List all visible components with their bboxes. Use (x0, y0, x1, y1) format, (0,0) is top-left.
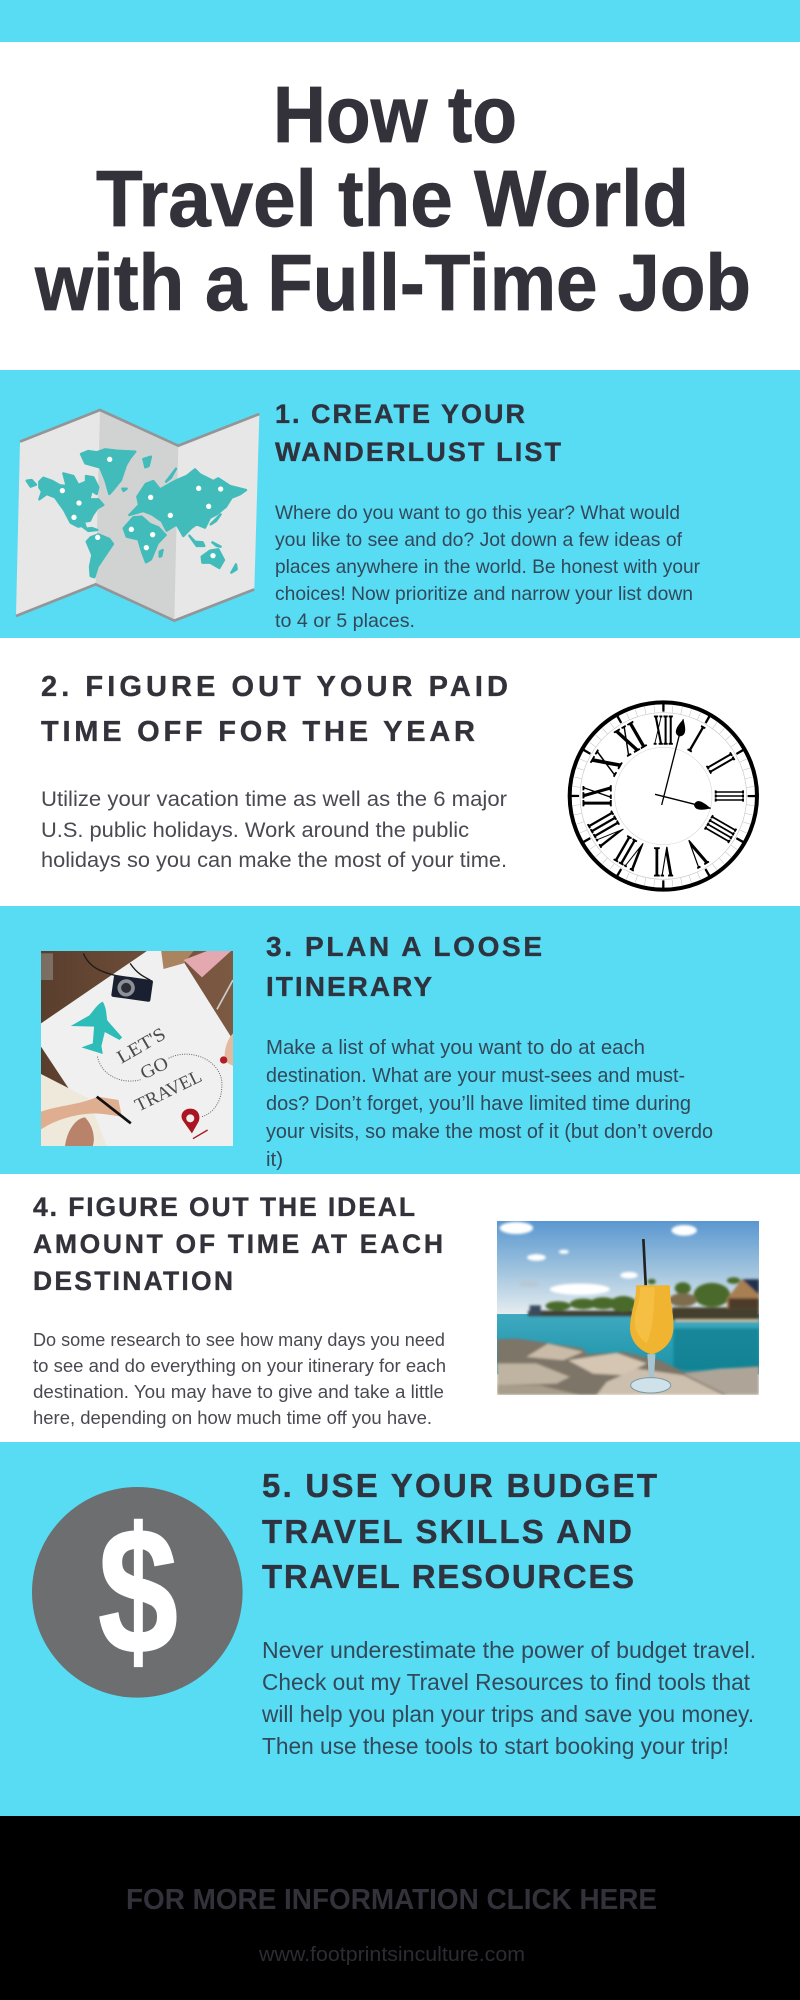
text: step 2 body: Utilize your vacation time as well as the 6 major (41, 787, 507, 811)
website url: www.footprintsinculture.com (258, 1944, 525, 1966)
text: step 2 body: U.S. public holidays. Work around the public (41, 818, 469, 842)
text: step 3 body: Make a list of what you want to do at each (266, 1037, 645, 1059)
text: step 5 body: Never underestimate the power of budget travel. (262, 1637, 756, 1663)
heading: step 5: TRAVEL RESOURCES (262, 1558, 634, 1595)
icon: dollar coin: $ (98, 1492, 178, 1692)
heading: step 1: WANDERLUST LIST (275, 437, 562, 467)
text: step 4 body (33, 1329, 446, 1428)
title (34, 70, 751, 327)
text: step 5 body (261, 1637, 756, 1759)
text: step 3 body: destination. What are your must-sees and must- (266, 1065, 685, 1087)
text: step 3 body: your visits, so make the most of it (but don’t overdo (266, 1121, 713, 1143)
text: step 4 body: to see and do everything on your itinerary for each (33, 1355, 446, 1376)
icon: roman numeral clock: III (705, 790, 754, 802)
icon: roman numeral clock: II (697, 746, 744, 779)
icon: roman numeral clock: IX (573, 785, 622, 807)
heading: step 4 (33, 1192, 443, 1296)
icon: roman numeral clock: VI (653, 838, 673, 887)
top cyan band (0, 0, 800, 42)
photo: let's go travel flatlay (41, 951, 233, 1146)
text: step 4 body: here, depending on how much time off you have. (33, 1407, 432, 1428)
heading: step 4: 4. FIGURE OUT THE IDEAL (33, 1192, 415, 1222)
text: step 2 body (41, 787, 507, 872)
panel: step 5 budget travel (0, 1442, 800, 1816)
footer panel (0, 1816, 800, 2000)
icon: roman numeral clock: V (678, 829, 715, 878)
icon: roman numeral clock: VIII (578, 805, 634, 853)
photo: let's go travel flatlay: LET'S (113, 1024, 170, 1068)
heading: step 5 (262, 1467, 657, 1595)
text: step 2 body: holidays so you can make the most of your time. (41, 848, 507, 872)
panel: step 2 paid time off (0, 638, 800, 906)
heading: step 2: 2. FIGURE OUT YOUR PAID (41, 671, 508, 703)
photo: mango drink on the beach (497, 1221, 759, 1395)
heading: step 5: TRAVEL SKILLS AND (262, 1513, 632, 1550)
text: step 4 body: destination. You may have to give and take a little (33, 1381, 444, 1402)
panel: step 1 wanderlust list (0, 370, 800, 638)
heading: step 5: 5. USE YOUR BUDGET (262, 1467, 657, 1504)
icon: roman numeral clock: XII (653, 705, 673, 754)
panel: step 3 loose itinerary (0, 906, 800, 1174)
text: step 5 body: Then use these tools to start booking your trip! (262, 1733, 729, 1759)
text: step 3 body (266, 1037, 713, 1171)
text: step 1 body: to 4 or 5 places. (275, 610, 415, 632)
text: step 5 body: will help you plan your trips and save you money. (261, 1701, 754, 1727)
heading: step 1 (275, 399, 562, 467)
text: step 1 body: places anywhere in the world. Be honest with your (275, 556, 700, 578)
icon: roman numeral clock (570, 702, 757, 890)
text: step 1 body: you like to see and do? Jot down a few ideas of (275, 529, 683, 551)
icon: roman numeral clock: IIII (695, 809, 746, 849)
title: with a Full-Time Job (34, 238, 751, 327)
text: step 5 body: Check out my Travel Resources to find tools that (262, 1669, 751, 1695)
heading: step 4: AMOUNT OF TIME AT EACH (33, 1229, 443, 1259)
heading: step 3 (266, 931, 542, 1002)
title: How to (273, 70, 517, 159)
title: Travel the World (96, 154, 689, 243)
heading: step 2: TIME OFF FOR THE YEAR (41, 716, 475, 748)
heading: step 4: DESTINATION (33, 1266, 233, 1296)
heading: step 3: ITINERARY (266, 971, 432, 1002)
icon: dollar coin (32, 1487, 243, 1698)
icon: roman numeral clock: X (580, 743, 632, 783)
text: step 3 body: it) (266, 1149, 283, 1171)
icon: roman numeral clock: I (682, 716, 711, 761)
text: step 1 body: choices! Now prioritize and narrow your list down (275, 583, 693, 605)
photo: let's go travel flatlay: GO (137, 1053, 172, 1084)
heading: step 3: 3. PLAN A LOOSE (266, 931, 542, 962)
call to action: FOR MORE INFORMATION CLICK HERE (126, 1884, 657, 1916)
icon: roman numeral clock: XI (608, 711, 653, 766)
panel: step 4 time at each destination (0, 1174, 800, 1442)
icon: folded world map (16, 410, 259, 621)
text: step 4 body: Do some research to see how many days you need (33, 1329, 445, 1350)
photo: let's go travel flatlay: TRAVEL (132, 1066, 205, 1116)
text: step 1 body (275, 502, 700, 632)
icon: roman numeral clock: VII (608, 826, 653, 881)
text: step 1 body: Where do you want to go this year? What would (275, 502, 680, 524)
heading: step 2 (41, 671, 508, 748)
text: step 3 body: dos? Don’t forget, you’ll have limited time during (266, 1093, 691, 1115)
heading: step 1: 1. CREATE YOUR (275, 399, 525, 429)
